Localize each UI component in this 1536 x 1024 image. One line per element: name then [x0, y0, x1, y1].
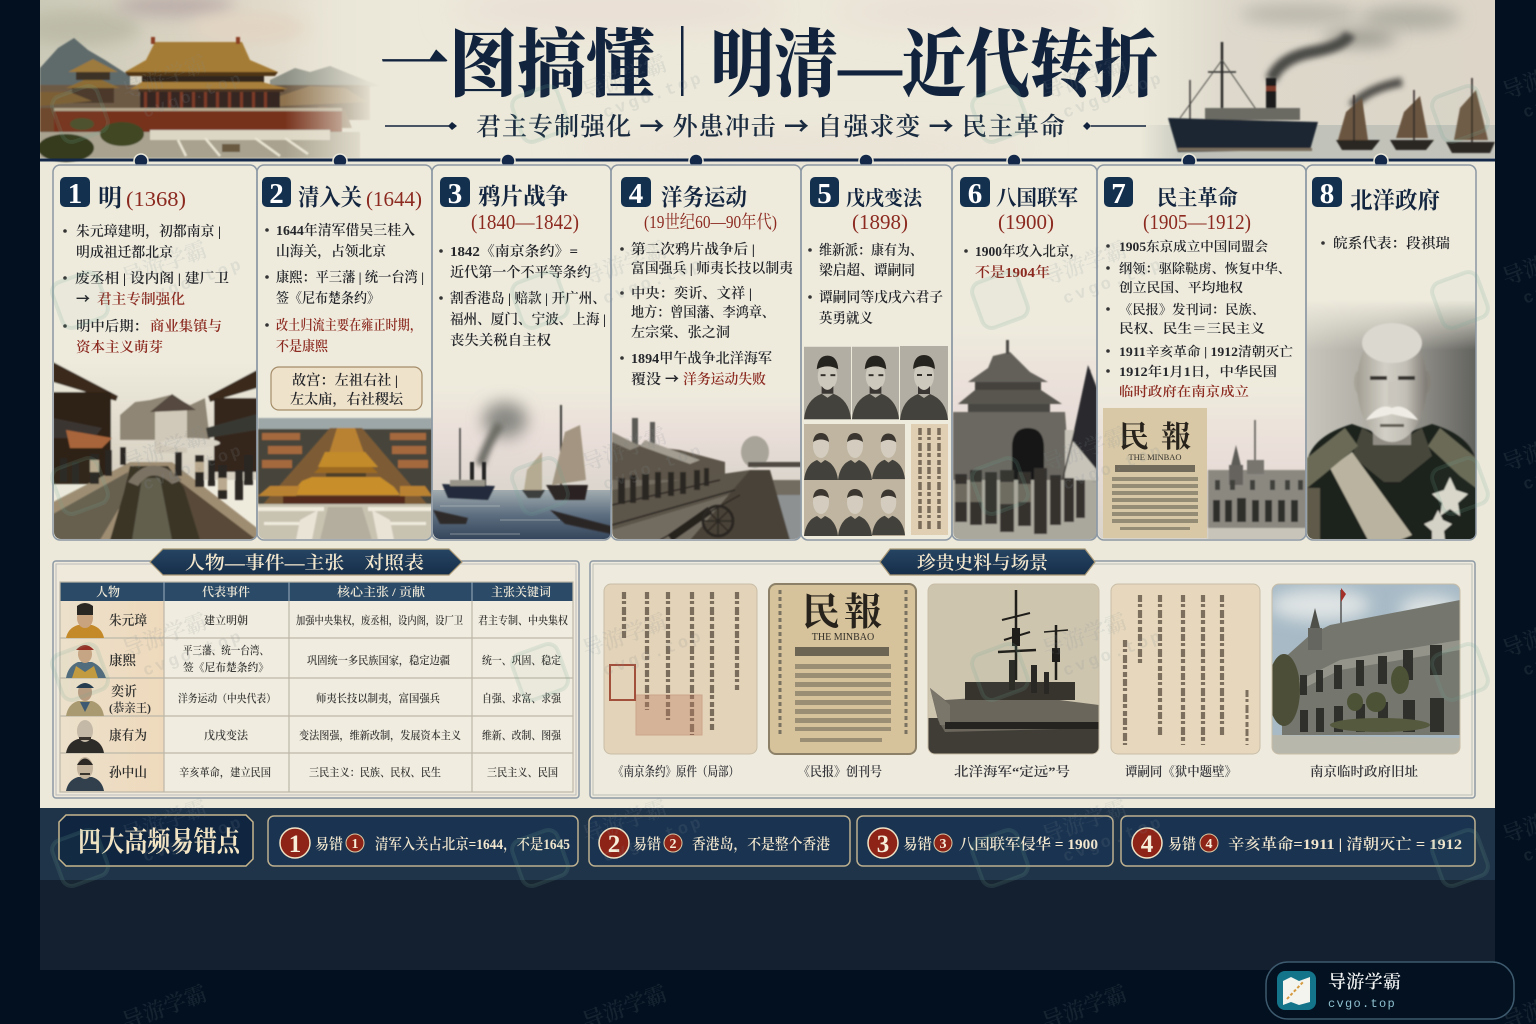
item: Tan Sitong prison poem — [1111, 584, 1260, 754]
illustration: Forbidden City aerial — [258, 418, 432, 540]
illustration: Minbao and Nanjing building: 民 報 — [1119, 420, 1191, 454]
row: 奕䜣: 洋务运动（中央代表） — [178, 691, 276, 705]
mistake 2: 易错 — [633, 835, 661, 853]
watermarks: 导游学霸 — [1039, 795, 1130, 848]
title — [380, 25, 1158, 107]
caption: 《民报》创刊号 — [798, 764, 882, 779]
row: 奕䜣: 师夷长技以制夷，富国强兵 — [316, 691, 440, 705]
panel: bottom dark band — [40, 808, 1495, 970]
watermarks: 导游学霸 — [1039, 423, 1130, 476]
bullets: 左宗棠、张之洞 — [631, 324, 730, 341]
heading: (1840—1842) — [471, 210, 579, 234]
watermarks: 导游学霸 — [119, 51, 210, 104]
watermarks: cvgo.top — [141, 814, 247, 868]
row: 孙中山: 辛亥革命，建立民国 — [179, 765, 271, 779]
bullets: 富国强兵 | 师夷长技以制夷 — [631, 260, 793, 277]
bullets — [1106, 239, 1293, 399]
panel: 5 戊戌变法 — [801, 165, 952, 540]
watermarks: cvgo.top — [1061, 442, 1167, 496]
panel: 4 洋务运动 — [611, 165, 801, 540]
watermarks: cvgo.top — [141, 628, 247, 682]
bullets — [808, 242, 943, 327]
bullets: 第二次鸦片战争后 | — [631, 241, 755, 258]
header illustration: steamship and junks — [1140, 0, 1495, 158]
heading — [298, 185, 422, 211]
watermarks: cvgo.top — [1061, 70, 1167, 124]
illustration: city gate and soldiers — [953, 325, 1097, 540]
bullets: 丧失关税自主权 — [450, 332, 551, 349]
bullets: 不是1904年 — [975, 264, 1050, 281]
watermarks: cvgo.top — [141, 442, 247, 496]
row: 奕䜣: (恭亲王) — [109, 700, 151, 715]
mistake 3: 八国联军侵华 = 1900 — [959, 835, 1098, 853]
mistake 2: 2 — [608, 831, 620, 858]
row: 孙中山: 孙中山 — [109, 764, 147, 780]
illustration: Duan Qirui portrait — [1307, 300, 1476, 540]
mistake 4: 4 — [1141, 831, 1154, 858]
badge 5 — [810, 177, 839, 210]
bullets: 康熙：平三藩 | 统一台湾 | — [276, 269, 424, 286]
row: 康熙: 统一、巩固、稳定 — [482, 653, 561, 667]
row: 康熙: 签《尼布楚条约》 — [183, 660, 269, 674]
card borders — [53, 165, 1476, 540]
badge 8 — [1312, 177, 1342, 210]
bullets: 中央：奕䜣、文祥 | — [631, 285, 752, 302]
heading — [1143, 186, 1251, 234]
item: Dingyuan warship photo — [928, 584, 1099, 754]
panel: 3 鸦片战争 — [432, 165, 611, 540]
heading: 鸦片战争 — [478, 184, 568, 209]
bullets: 1842《南京条约》= — [450, 243, 578, 260]
heading: 明 — [98, 185, 122, 212]
watermarks: 导游学霸 — [579, 609, 670, 662]
heading: (1368) — [126, 187, 186, 211]
bullets — [439, 243, 606, 349]
row: 奕䜣: 奕䜣 — [111, 684, 137, 699]
row: 孙中山 — [66, 757, 558, 791]
bullets: → — [665, 369, 679, 389]
ribbon heading: 珍贵史料与场景 — [917, 553, 1048, 573]
bullets: 明成祖迁都北京 — [76, 244, 173, 261]
watermarks: cvgo.top — [601, 442, 707, 496]
illustration: six gentlemen portraits — [804, 424, 905, 536]
heading: (1644) — [366, 187, 422, 211]
mistake 3: 易错 — [903, 835, 932, 853]
heading — [846, 186, 924, 234]
bullet: 皖系代表：段祺瑞 — [1333, 235, 1450, 252]
watermarks: cvgo.top — [1061, 628, 1167, 682]
row: 奕䜣 — [66, 683, 562, 716]
badge 8: 8 — [1320, 178, 1334, 210]
item: Minbao first issue — [769, 584, 916, 754]
caption: 《南京条约》原件（局部） — [613, 764, 739, 779]
badge 5: 5 — [817, 178, 832, 210]
bullets: 不是康熙 — [276, 339, 329, 355]
bullets: 1912年1月1日，中华民国 — [1119, 364, 1277, 380]
panel: historical materials gallery — [590, 549, 1475, 798]
watermarks: cvgo.top — [601, 628, 707, 682]
bullets: 纲领：驱除鞑虏、恢复中华、 — [1119, 261, 1291, 276]
table header: 主张关键词 — [491, 584, 551, 599]
bullets: 1905东京成立中国同盟会 — [1119, 239, 1268, 254]
watermarks: 导游学霸 — [579, 423, 670, 476]
heading: 民主革命 — [1157, 186, 1238, 210]
watermarks: 导游学霸 — [579, 51, 670, 104]
heading: 洋务运动 — [661, 185, 747, 210]
illustration: ships at sea — [433, 385, 611, 540]
watermarks: 导游学霸 — [1039, 51, 1130, 104]
mistake 4: 4 — [1206, 837, 1212, 852]
ribbon heading — [880, 549, 1095, 575]
mistake 2 — [589, 816, 850, 866]
mistake 1: 1 — [289, 831, 301, 858]
callout: 故宫: 左太庙，右社稷坛 — [290, 391, 404, 408]
mistake 3: 3 — [940, 837, 946, 852]
timeline — [40, 154, 1495, 168]
bullets: 君主专制强化 — [97, 291, 185, 308]
bullets: 1900年攻入北京， — [975, 243, 1083, 260]
bullets: 1911辛亥革命 | 1912清朝灭亡 — [1119, 344, 1293, 359]
mistake 4: 辛亥革命=1911 | 清朝灭亡 = 1912 — [1228, 835, 1462, 853]
bullets: 近代第一个不平等条约 — [450, 264, 591, 281]
bullets: 1894甲午战争北洋海军 — [631, 350, 772, 367]
badge 6 — [960, 177, 990, 210]
watermarks: cvgo.top — [141, 256, 247, 310]
table — [60, 582, 573, 792]
caption: 北洋海军“定远”号 — [954, 764, 1070, 779]
badge 7 — [1104, 177, 1133, 210]
ribbon heading: 人物—事件—主张 对照表 — [185, 553, 424, 573]
watermarks: cvgo.top — [601, 70, 707, 124]
row: 康熙: 平三藩、统一台湾、 — [183, 643, 269, 657]
heading: four common mistakes: 四大高频易错点 — [78, 826, 242, 858]
title: 一图搞懂 — [380, 25, 655, 107]
bullets: 洋务运动失败 — [683, 371, 766, 388]
brand badge: 导游学霸 — [1328, 972, 1401, 992]
badge 4 — [621, 177, 651, 210]
bullets: 1644年清军借吴三桂入 — [276, 222, 415, 239]
illustration: market street and canal — [53, 360, 257, 540]
illustration: handwritten scroll — [911, 424, 948, 535]
panel: 7 民主革命 — [1097, 165, 1306, 540]
bullets: 维新派：康有为、 — [819, 242, 923, 259]
panel: 6 八国联军 — [952, 165, 1097, 540]
table header: 代表事件 — [202, 584, 250, 599]
heading — [644, 185, 777, 233]
watermarks: 导游学霸 — [119, 423, 210, 476]
bullets: 地方：曾国藩、李鸿章、 — [631, 304, 775, 321]
row: 朱元璋: 朱元璋 — [109, 612, 147, 628]
panel: 2 清入关 — [257, 165, 432, 540]
panel: 1 明 — [53, 165, 257, 540]
row: 朱元璋: 君主专制、中央集权 — [478, 613, 568, 627]
bullets: 临时政府在南京成立 — [1119, 384, 1249, 399]
row: 康有为: 戊戌变法 — [204, 728, 249, 742]
subtitle: 君主专制强化 → 外患冲击 → 自强求变 → 民主革命 — [476, 107, 1065, 143]
bullets — [964, 243, 1083, 281]
mistake 1: 易错 — [315, 835, 343, 853]
watermarks: 导游学霸 — [119, 237, 210, 290]
bullets: 《民报》发刊词：民族、 — [1119, 302, 1265, 317]
badge 4: 4 — [629, 178, 643, 210]
bullets: 覆没 — [631, 371, 661, 388]
callout: 故宫: 故宫：左祖右社 | — [292, 372, 398, 389]
item: Minbao first issue: THE MINBAO — [812, 632, 874, 643]
watermarks: 导游学霸 — [579, 795, 670, 848]
heading — [471, 184, 579, 234]
panel: poster body background — [40, 0, 1495, 810]
icon: map — [1277, 971, 1316, 1010]
brand badge: cvgo.top — [1328, 997, 1396, 1011]
row: 康有为: 维新、改制、图强 — [482, 728, 562, 742]
row: 朱元璋: 加强中央集权，废丞相，设内阁，设厂卫 — [296, 613, 463, 627]
watermarks: 导游学霸 — [1039, 237, 1130, 290]
watermarks: cvgo.top — [1061, 814, 1167, 868]
watermarks: cvgo.top — [601, 814, 707, 868]
bullets: 签《尼布楚条约》 — [276, 290, 380, 307]
table header: 人物 — [96, 584, 120, 599]
mistake 2: 2 — [670, 837, 676, 852]
mistake 1: 清军入关占北京=1644，不是1645 — [375, 835, 570, 853]
illustration: Minbao and Nanjing building — [1098, 408, 1306, 539]
badge 2 — [262, 177, 291, 210]
heading: 清入关 — [298, 185, 362, 210]
bullets: 废丞相 | 设内阁 | 建厂卫 — [75, 270, 229, 287]
row: 奕䜣: 自强、求富、求强 — [482, 691, 562, 705]
heading: 北洋政府 — [1350, 188, 1440, 213]
illustration: Minbao and Nanjing building: THE MINBAO — [1128, 452, 1182, 462]
bullets: 谭嗣同等戊戌六君子 — [819, 289, 943, 306]
badge 2: 2 — [269, 178, 284, 210]
watermarks: 导游学霸 — [579, 237, 670, 290]
bullets: 朱元璋建明，初都南京 | — [76, 223, 221, 240]
row: 康熙 — [66, 643, 561, 678]
badge 1 — [60, 177, 90, 210]
bullets: 改土归流主要在雍正时期， — [276, 317, 422, 334]
bullets: 创立民国、平均地权 — [1119, 280, 1243, 295]
panel: 8 北洋政府 — [1306, 165, 1476, 540]
heading: (1900) — [998, 210, 1054, 234]
bullets — [265, 222, 424, 355]
row: 康有为: 康有为 — [109, 727, 147, 743]
watermarks: cvgo.top — [601, 256, 707, 310]
title: 明清—近代转折 — [710, 25, 1158, 107]
item: Minbao first issue: 民 報 — [802, 592, 882, 634]
row: 康有为 — [66, 720, 562, 753]
row: 康熙: 巩固统一多民族国家，稳定边疆 — [307, 653, 450, 667]
mistake 4 — [1121, 816, 1475, 866]
badge 7: 7 — [1111, 178, 1126, 210]
bullets: → — [76, 289, 90, 309]
watermarks: 导游学霸 — [1039, 609, 1130, 662]
heading: (1898) — [852, 210, 908, 234]
row: 孙中山: 三民主义、民国 — [487, 766, 558, 779]
item: Treaty of Nanjing document — [604, 584, 757, 754]
mistake 3: 3 — [877, 831, 889, 858]
bullets: 资本主义萌芽 — [76, 339, 163, 356]
mistake 4: 易错 — [1168, 835, 1196, 853]
bullets: 山海关，占领北京 — [276, 243, 386, 260]
watermarks: cvgo.top — [1061, 256, 1167, 310]
bullets: 割香港岛 | 赔款 | 开广州、 — [450, 290, 606, 307]
panel: person-event-idea table — [53, 549, 579, 798]
heading: (19世纪60—90年代) — [644, 211, 777, 233]
heading — [98, 185, 186, 212]
heading — [996, 186, 1078, 234]
heading: 戊戌变法 — [846, 186, 924, 210]
caption: 谭嗣同《狱中题壁》 — [1125, 764, 1237, 779]
bullets: 商业集镇与 — [150, 318, 222, 335]
bullets — [63, 223, 229, 356]
table header — [96, 584, 551, 599]
mistake 2: 香港岛，不是整个香港 — [692, 835, 830, 853]
row: 康有为: 变法图强，维新改制，发展资本主义 — [299, 728, 461, 742]
heading: (1905—1912) — [1143, 210, 1251, 234]
bullets: 梁启超、谭嗣同 — [819, 262, 915, 279]
illustration: railway and arsenal — [612, 416, 800, 539]
bullets: 英勇就义 — [819, 310, 873, 327]
heading: four common mistakes — [59, 815, 253, 866]
bullets — [620, 241, 793, 389]
badge 3: 3 — [448, 178, 462, 210]
watermarks: cvgo.top — [141, 70, 247, 124]
mistake 3 — [857, 816, 1113, 866]
watermarks: 导游学霸 — [119, 609, 210, 662]
item: Nanjing provisional government photo — [1268, 584, 1460, 754]
bullets: 明中后期： — [76, 318, 148, 335]
illustration: three reformer portraits — [804, 346, 948, 420]
bullets: 福州、厦门、宁波、上海 | — [450, 311, 606, 328]
row: 朱元璋 — [66, 603, 568, 638]
heading: 八国联军 — [996, 186, 1078, 210]
callout: 故宫 — [271, 367, 422, 410]
watermarks: 导游学霸 — [119, 795, 210, 848]
row: 康熙: 康 熙 — [109, 653, 136, 668]
row: 孙中山: 三民主义：民族、民权、民生 — [309, 765, 441, 779]
table header: 核心主张 / 贡献 — [337, 584, 426, 599]
row: 朱元璋: 建立明朝 — [204, 613, 248, 627]
brand badge — [1266, 962, 1514, 1019]
badge 6: 6 — [968, 178, 982, 210]
ribbon heading — [150, 549, 462, 575]
mistake 1 — [268, 816, 578, 866]
badge 3 — [440, 177, 470, 210]
header illustration: palace — [40, 0, 370, 163]
bullets: 民权、民生＝三民主义 — [1119, 321, 1265, 336]
mistake 1: 1 — [352, 837, 358, 852]
caption: 南京临时政府旧址 — [1310, 764, 1418, 779]
badge 1: 1 — [68, 178, 82, 210]
